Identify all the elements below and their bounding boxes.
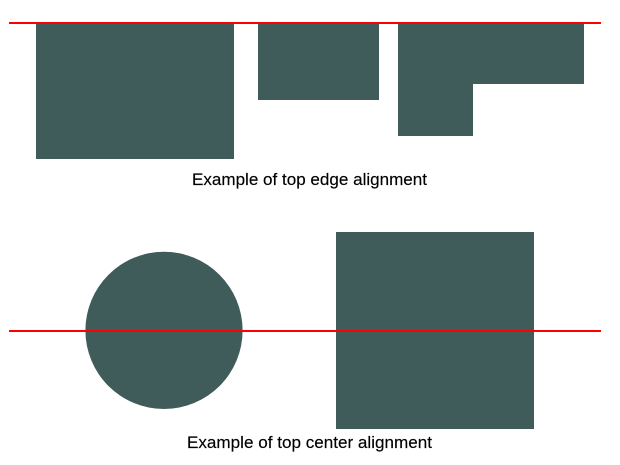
shape: square xyxy=(336,232,534,429)
caption: top edge alignment: Example of top edge alignment xyxy=(192,171,427,189)
caption: top center alignment: Example of top center alignment xyxy=(187,434,432,452)
shape: L-shaped block xyxy=(398,24,584,136)
shape: circle xyxy=(85,252,243,409)
center alignment line xyxy=(9,330,601,332)
top alignment line xyxy=(9,22,601,24)
panel: top edge alignment example xyxy=(9,22,601,189)
shape: large rectangle xyxy=(36,24,234,159)
shape: small rectangle xyxy=(258,24,379,100)
panel: top center alignment example xyxy=(9,232,601,452)
